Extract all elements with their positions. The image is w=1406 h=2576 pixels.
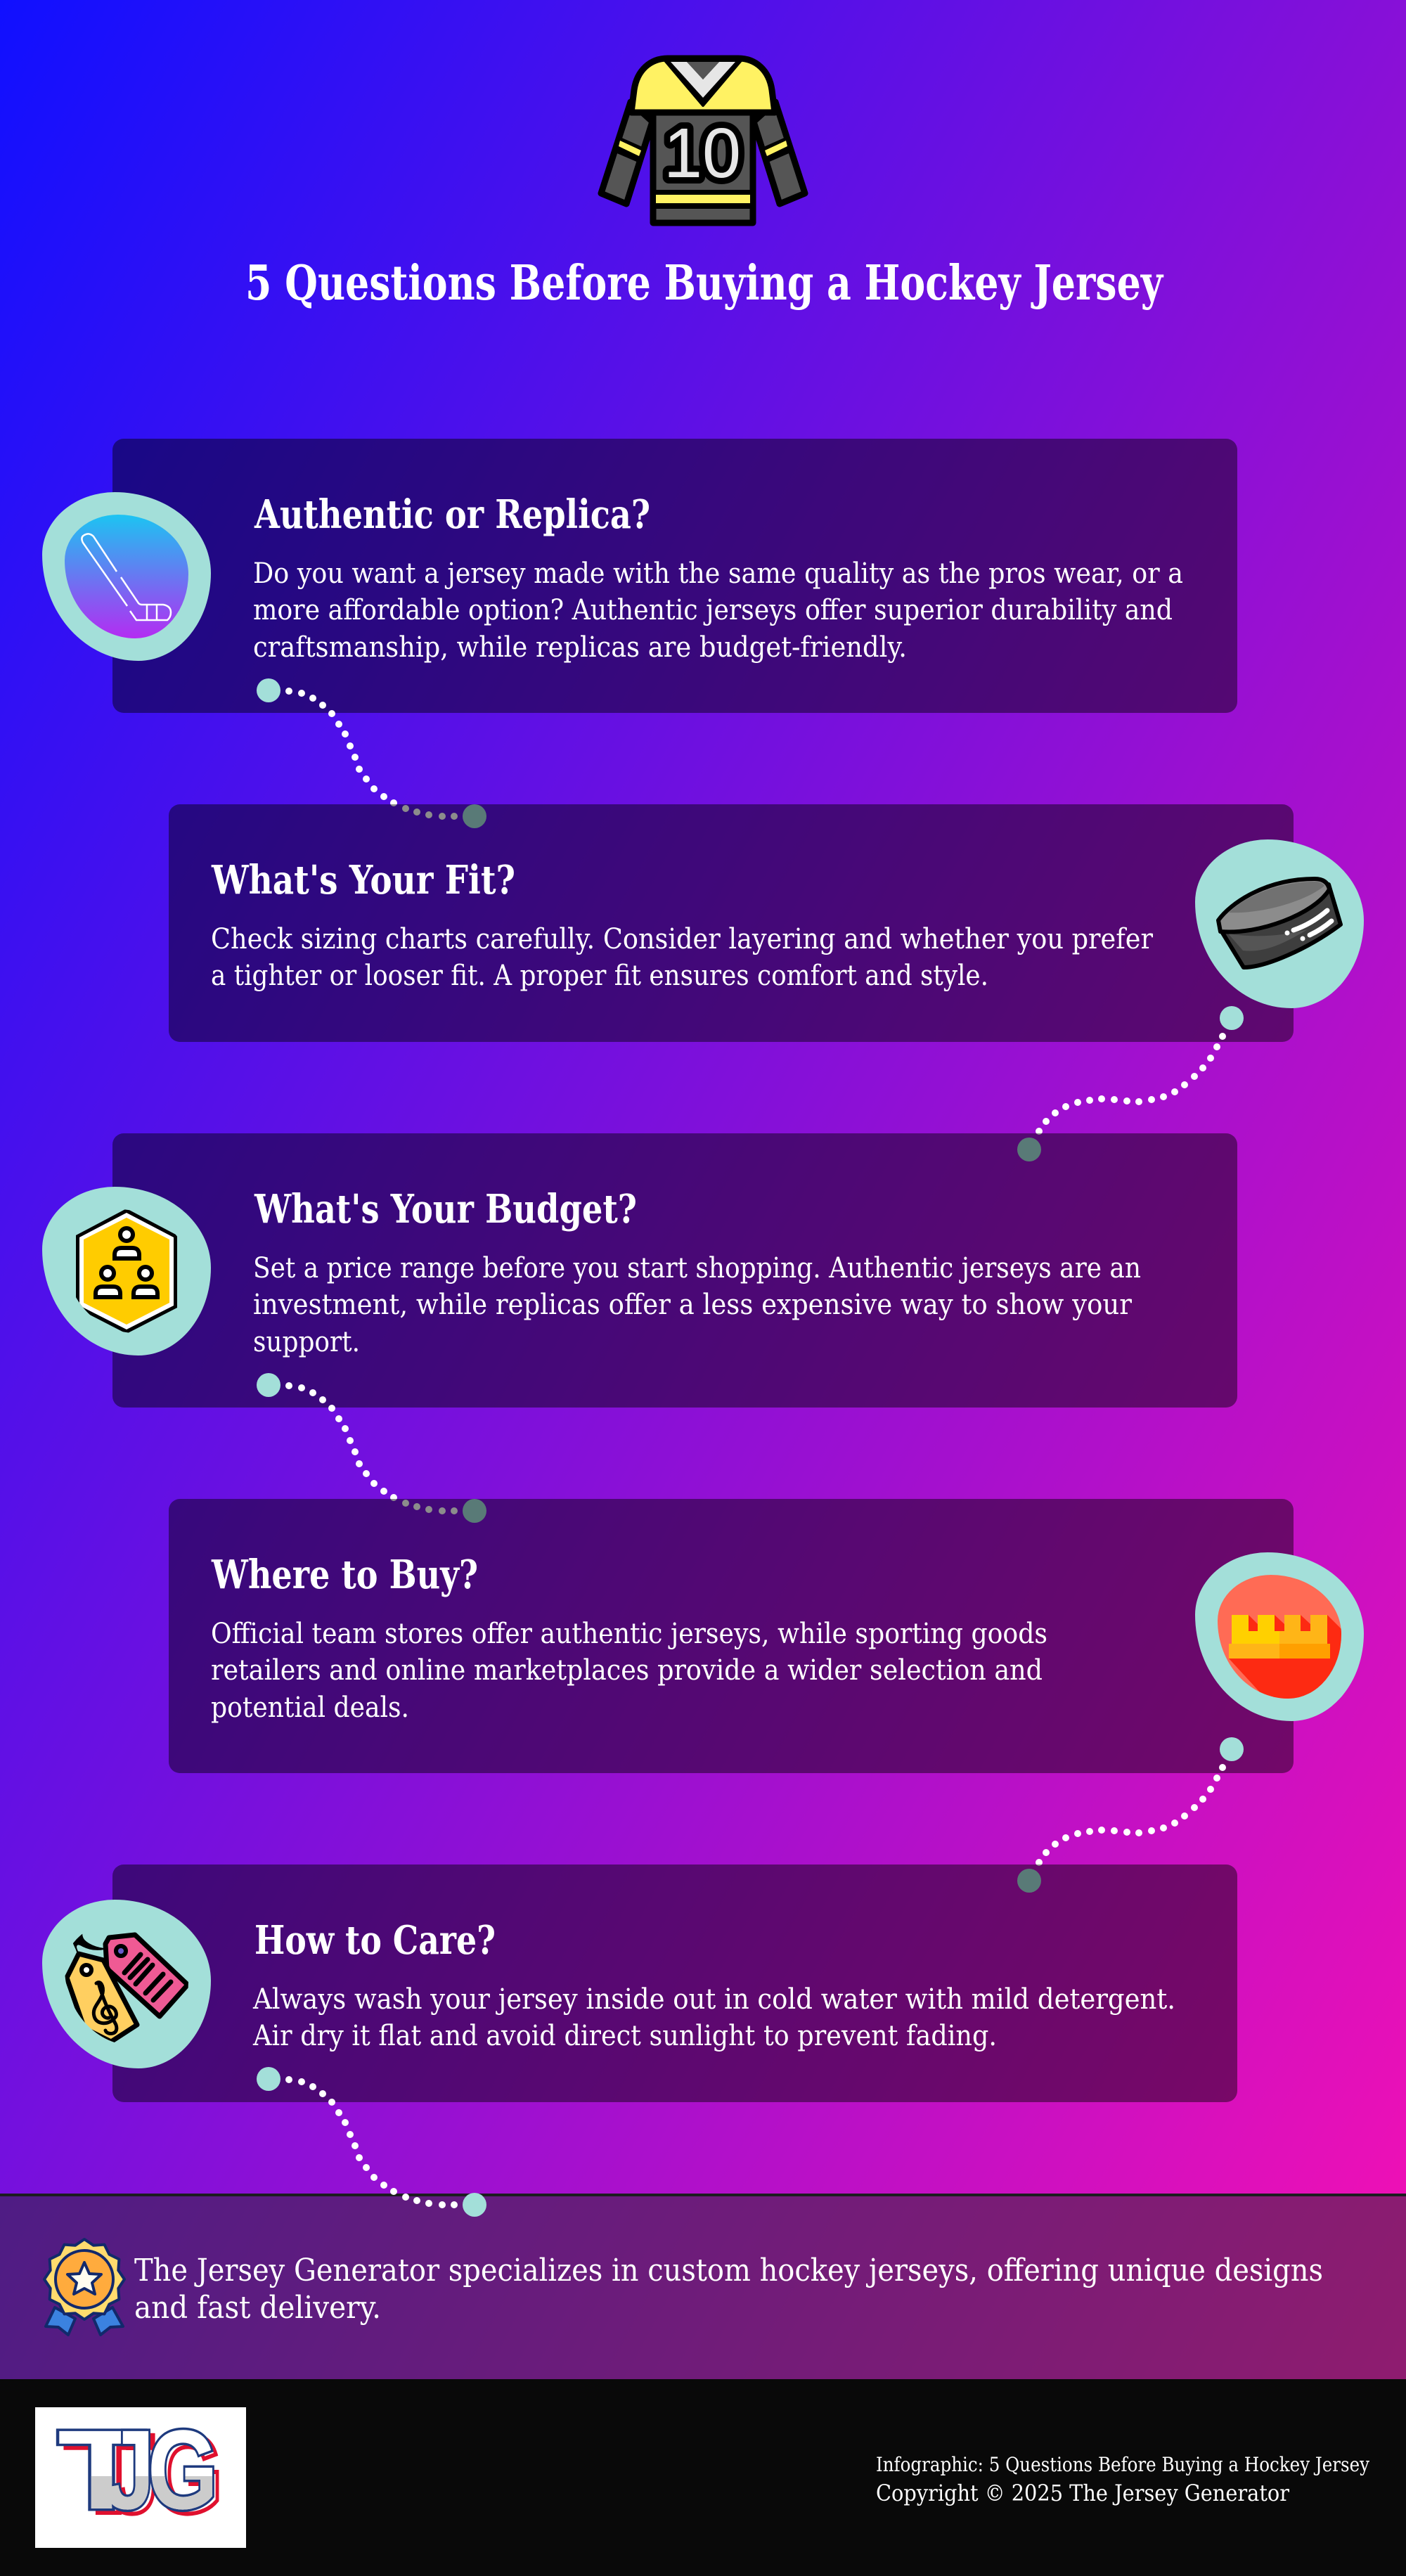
panel: what's your fit [169,804,1364,1042]
body text: potential deals. [211,1692,409,1724]
footer background [0,2379,1406,2576]
panel: authentic or replica [42,439,1237,713]
panel: where to buy [169,1499,1364,1773]
banner background [0,2196,1406,2379]
panel: footer [0,2379,1406,2576]
footer credits [876,2453,1369,2506]
connector: card 1 to card 2 [257,678,486,828]
body text: Official team stores offer authentic jerseys, while sporting goods [211,1618,1047,1650]
panel: how to care [42,1865,1237,2102]
logo: G [148,2407,218,2532]
jersey body [653,112,753,223]
body text: Always wash your jersey inside out in cold water with mild detergent. [252,1983,1175,2016]
body text: a tighter or looser fit. A proper fit ensures comfort and style. [211,960,988,992]
body text: investment, while replicas offer a less expensive way to show your [253,1289,1133,1321]
icon: hockey puck [1195,839,1364,1008]
heading: Authentic or Replica? [254,491,650,538]
icon: hockey jersey [601,58,805,223]
jersey number: 10 [664,114,741,193]
body text: craftsmanship, while replicas are budget-friendly. [253,631,907,664]
banner text: The Jersey Generator specializes in custom hockey jerseys, offering unique designs [134,2253,1323,2288]
body text: more affordable option? Authentic jerseys offer superior durability and [253,594,1173,626]
connector: card 3 to card 4 [257,1373,486,1523]
logo: T [58,2407,146,2532]
body text: Check sizing charts carefully. Consider layering and whether you prefer [211,923,1154,955]
heading: How to Care? [254,1917,496,1964]
right sleeve [754,102,805,204]
body text: retailers and online marketplaces provide a wider selection and [211,1654,1043,1687]
panel: company banner [0,2194,1406,2379]
body text [211,1618,1047,1724]
logo: J [104,2407,155,2532]
body text [252,1983,1175,2052]
heading: What's Your Fit? [211,857,515,903]
connector: card 2 to card 3 [1017,1006,1244,1161]
logo: G [148,2407,218,2532]
icon: team hexagon [42,1187,211,1355]
left sleeve [601,102,652,204]
heading: Where to Buy? [211,1552,478,1598]
icon: clothing tags [42,1900,211,2068]
body text: Set a price range before you start shopping. Authentic jerseys are an [253,1252,1141,1284]
sleeve stripes [614,136,792,163]
card background [169,804,1294,1042]
logo [35,2407,246,2548]
logo: J [104,2407,155,2532]
card background [169,1499,1294,1773]
body text [211,923,1154,992]
body text: support. [253,1326,360,1358]
card background [112,439,1237,713]
connector: card 4 to card 5 [1017,1737,1244,1893]
logo: J [109,2411,160,2537]
waist stripes [653,190,753,209]
card background [112,1865,1237,2102]
body text: Do you want a jersey made with the same quality as the pros wear, or a [253,558,1183,590]
icon: store castle [1195,1552,1364,1721]
body text [253,558,1183,664]
banner text [134,2253,1323,2326]
heading: What's Your Budget? [254,1186,637,1232]
panel: what's your budget [42,1133,1237,1408]
collar [664,60,742,105]
title: 5 Questions Before Buying a Hockey Jersey [245,255,1164,311]
icon: hockey stick [42,492,211,661]
yoke [631,58,775,112]
body text: Air dry it flat and avoid direct sunlight to prevent fading. [252,2020,997,2052]
logo: T [65,2411,153,2537]
logo: G [153,2411,223,2537]
connector: card 5 to banner [257,2067,486,2217]
footer credits: Copyright © 2025 The Jersey Generator [876,2480,1290,2506]
card background [112,1133,1237,1408]
icon: award medal [44,2239,124,2335]
banner text: and fast delivery. [134,2290,381,2326]
logo: T [58,2407,146,2532]
body text [253,1252,1141,1358]
